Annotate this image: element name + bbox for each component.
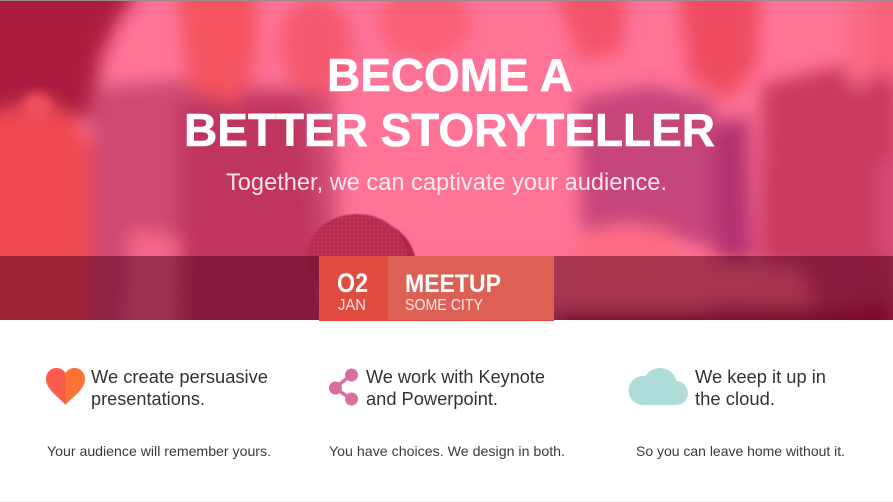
event info box: MEETUP	[405, 270, 501, 298]
icon: share	[329, 368, 358, 406]
heading: kept in the cloud	[695, 366, 826, 409]
heading: kept in the cloud: the cloud.	[695, 388, 775, 409]
text: audience remembers: Your audience will remember yours.	[47, 443, 271, 459]
subtitle: Together, we can captivate your audience.	[226, 169, 667, 196]
panel: keynote and powerpoint	[329, 366, 565, 459]
title: BECOME A	[327, 49, 573, 101]
icon: cloud	[628, 368, 688, 405]
icon: heart	[46, 368, 85, 405]
event info box	[319, 256, 554, 321]
event info box: SOME CITY	[405, 297, 483, 314]
heading: persuasive presentations	[91, 366, 268, 409]
panel: cloud	[628, 366, 845, 459]
event date box	[319, 256, 388, 320]
title	[184, 49, 715, 156]
blurred audience photo with pink overlay	[0, 0, 893, 340]
heading: keynote and powerpoint: and Powerpoint.	[366, 388, 498, 409]
dark event band	[0, 256, 893, 320]
heading: persuasive presentations: presentations.	[91, 388, 205, 409]
heading: keynote and powerpoint: We work with Keynote	[366, 366, 545, 387]
panel: hero banner	[0, 0, 893, 340]
heading: kept in the cloud: We keep it up in	[695, 366, 826, 387]
heading: keynote and powerpoint	[366, 366, 545, 409]
panel: persuasive presentations	[46, 366, 271, 459]
microphone	[307, 213, 416, 282]
heading: persuasive presentations: We create persuasive	[91, 366, 268, 387]
event date box: O2	[337, 268, 368, 298]
text: leave home: So you can leave home without it.	[636, 443, 845, 459]
event date box: JAN	[338, 297, 366, 314]
title: BETTER STORYTELLER	[184, 104, 715, 156]
text: choices: You have choices. We design in both.	[329, 443, 565, 459]
